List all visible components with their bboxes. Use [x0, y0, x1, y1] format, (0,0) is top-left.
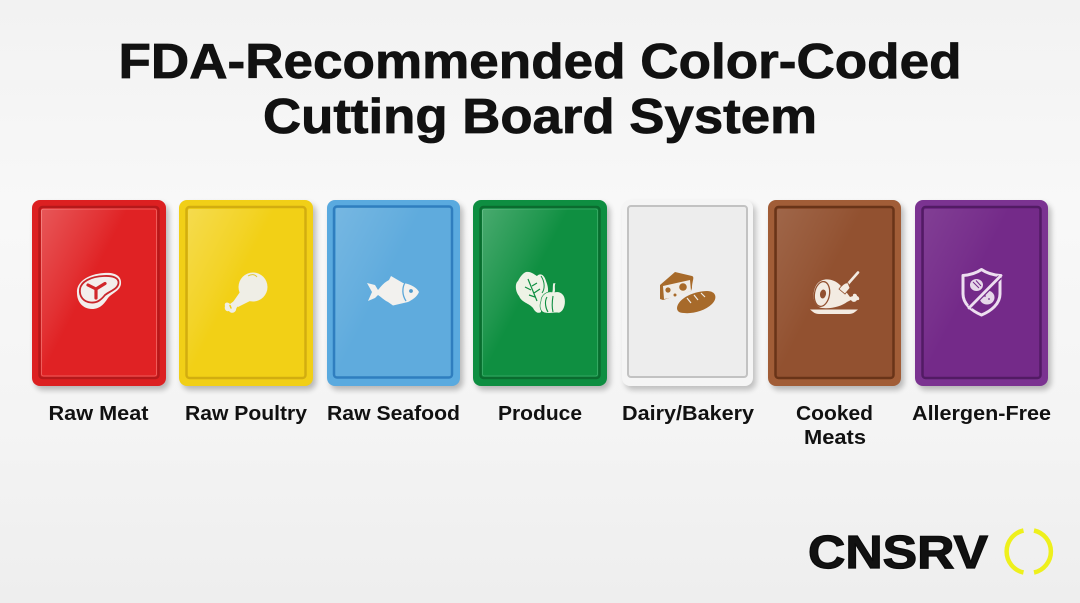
icon: chicken drumstick — [225, 272, 268, 313]
title: FDA-Recommended Color-Coded — [118, 35, 961, 89]
logo: CNSRV: CNSRV — [808, 526, 988, 578]
panel: allergen-free board — [915, 200, 1051, 390]
icon: leafy greens and pepper — [516, 272, 565, 313]
panel: produce board — [473, 200, 610, 390]
label: allergen-free: Allergen-Free — [912, 403, 1051, 425]
icon: yellow ring — [1007, 530, 1051, 572]
title: Cutting Board System — [263, 90, 817, 144]
icon: ham on a plate with fork — [810, 272, 859, 314]
label: cooked meats: Cooked — [796, 403, 873, 425]
panel: cooked meats board — [768, 200, 904, 390]
label: cooked meats — [796, 403, 873, 449]
label: dairy/bakery: Dairy/Bakery — [622, 403, 755, 425]
panel: raw poultry board — [179, 200, 316, 390]
label: produce: Produce — [498, 403, 582, 425]
panel: raw seafood board — [327, 200, 463, 390]
logo: CNSRV — [808, 526, 1051, 578]
icon: cheese wedge and bread — [660, 272, 715, 313]
panel: dairy and bakery board — [622, 200, 756, 390]
label: raw meat: Raw Meat — [48, 403, 149, 425]
label: cooked meats: Meats — [804, 427, 866, 449]
icon: steak — [77, 273, 121, 309]
label: raw poultry: Raw Poultry — [185, 403, 308, 425]
icon: fish — [367, 276, 419, 306]
icon: allergen shield — [963, 270, 1001, 315]
title — [118, 35, 961, 144]
panel: raw meat board — [32, 200, 169, 390]
label: raw seafood: Raw Seafood — [327, 403, 460, 425]
